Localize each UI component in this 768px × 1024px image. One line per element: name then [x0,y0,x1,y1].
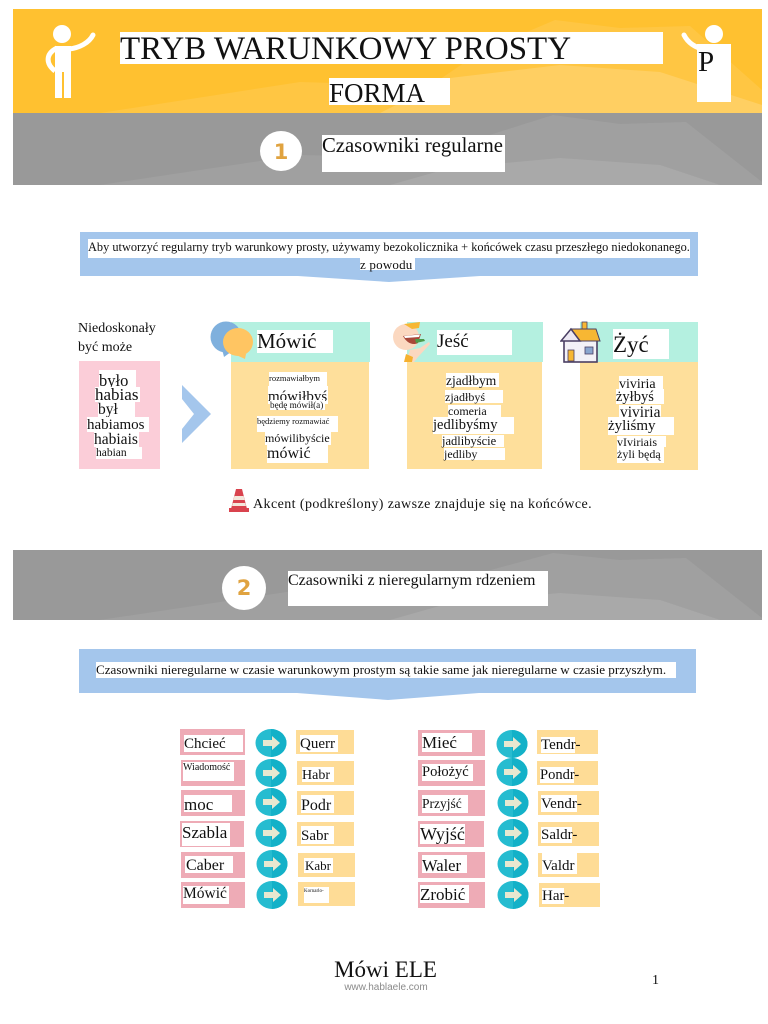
verb heading: Mówić [257,329,316,353]
conjugated form: rozmawiałbym [269,373,320,383]
verb row: Chcieć [180,729,245,755]
callout text line 2: z powodu [360,257,413,272]
stem: Pondr- [537,761,598,785]
conjugated form: będę mówił(a) [270,400,323,410]
icon: speech bubbles [210,322,253,359]
list: irregular stems left column [180,729,355,909]
stem: Kornarlo [298,882,355,906]
verb row: Wiadomość [181,760,245,786]
number badge 1 [260,131,302,171]
arrow 3 [256,788,286,816]
icon: house [560,322,601,363]
arrow 1 [256,729,286,757]
conjugated form: będziemy rozmawiać [257,416,329,426]
verb row: Wyjść [418,821,484,847]
verb header background [580,322,698,362]
conjugated form [448,405,501,417]
callout: regular conditional rule [80,232,698,282]
band background: yellow and gray mountains [13,9,762,185]
section heading 1: Czasowniki regularne [322,135,503,157]
stem: Har- [539,883,600,907]
stem: Sabr [297,822,354,846]
stem: Kornarlo: Kornarlo- [304,889,324,894]
number badge 1: 1 [274,140,288,164]
title fragment box: P [698,46,714,78]
verb row: Caber [181,852,245,878]
verb row: Mówić: Mówić [183,885,227,902]
conjugation background [231,362,369,469]
conjugated form: comeria [448,404,487,418]
arrow: chevron [182,385,211,443]
stem: Valdr: Valdr [542,858,574,874]
conjugated form [619,376,663,390]
ending [96,447,142,459]
conjugated form: żyłbyś [616,389,654,405]
icon: person eating [393,322,430,362]
verb row: Mówić [181,882,245,908]
band background: gray mountains [13,550,762,620]
ending [99,370,136,387]
verb row: Przyjść: Przyjść [422,796,462,811]
ending: habiais [94,431,138,448]
arrow 2 [496,758,528,786]
stem: Tendr-: Tendr- [541,737,580,753]
icon: person right [682,25,723,50]
arrow 5 [256,850,288,878]
conjugated form: mówiłbyś [268,389,327,405]
conjugated form [267,445,328,463]
verb row: Mieć: Mieć [422,733,457,752]
stem: Vendr-: Vendr [541,796,577,812]
page number: 1 [652,973,659,988]
arrow 4 [256,819,286,847]
arrow 1 [496,730,528,758]
conjugated form: viviria [620,404,660,421]
stem: Querr [296,730,354,754]
verb row: Zrobić [418,882,485,908]
conjugated form: jedlibyśmy [433,417,497,433]
verb row: moc [181,790,245,816]
verb row: Wiadomość: Wiadomość [183,762,230,773]
conjugated form: jedliby [444,447,477,461]
stem: Pondr-: Pondr- [540,767,579,783]
callout background [79,649,696,700]
verb row: Chcieć: Chcieć [184,736,226,752]
ending: było [99,371,128,390]
conjugated form: mówić [267,445,311,462]
arrow 6 [256,881,288,909]
panel: Żyć [560,322,698,470]
stem: Saldr-: Saldr- [541,827,577,843]
conjugation background [580,362,698,470]
verb row: Waler: Waler [422,856,461,875]
section band 2 [13,550,762,620]
conjugated form [608,417,674,435]
verb row: Szabla: Szabla [182,823,227,842]
verb heading [437,330,512,355]
imperfect label: Niedoskonały [78,321,156,336]
ending: habian [96,447,127,459]
title: TRYB WARUNKOWY PROSTY [120,31,571,67]
verb row: Mieć [418,730,485,756]
callout text line 1: Aby utworzyć regularny tryb warunkowy prosty, używamy bezokolicznika + końcówek czasu przeszłego niedokonanego. [88,240,690,254]
verb row: Caber: Caber [186,857,224,874]
verb header background [231,322,370,362]
stem: Vendr- [538,791,599,815]
stem: Har-: Har- [542,888,569,904]
stem: Habr: Habr [302,768,330,783]
verb row: Wyjść: Wyjść [420,824,465,844]
subtitle: FORMA [329,78,425,108]
stem: Tendr- [537,730,598,754]
verb header background [407,322,543,362]
icon: person left [46,25,96,98]
stem: Sabr: Sabr [301,828,328,844]
conjugated form [269,372,327,386]
conjugated form: zjadłbyś [445,390,485,404]
stem: Podr [297,791,354,815]
arrow 4 [498,819,528,847]
conjugated form: zjadłbym [446,373,496,388]
arrow 6 [498,881,528,909]
stem: Saldr- [538,822,599,846]
stem: Kabr: Kabr [305,858,331,873]
conjugated form: jadlibyście [442,434,496,448]
accent text: Akcent (podkreślony) zawsze znajduje się na końcówce. [253,497,592,512]
verb row: Położyć [418,760,485,786]
ending [98,402,135,417]
panel: Jeść [393,322,543,469]
stem: Vendr-: - [577,796,582,812]
title fragment box [697,44,731,102]
conjugated form [445,390,503,403]
number badge 2: 2 [237,576,251,600]
verb row: Szabla [180,821,244,847]
verb heading: Żyć [613,332,649,357]
footer brand [334,957,437,993]
list: irregular stems right column [418,730,600,909]
stem: Kabr [298,853,355,877]
section heading 1 [322,135,505,172]
arrow 3 [498,789,528,817]
conjugated form: żyliśmy [608,418,656,434]
imperfect label [78,321,156,355]
brand name: Mówi ELE [334,957,437,982]
section heading 2 [288,571,548,606]
header band with title [13,9,762,185]
panel: imperfect endings [79,361,160,469]
verb row: Waler [418,852,485,878]
arrow 5 [498,850,528,878]
icon: traffic cone [229,489,249,512]
callout background [80,232,698,282]
verb row: Położyć: Położyć [422,764,469,780]
section heading 2: Czasowniki z nieregularnym rdzeniem [288,572,535,589]
conjugated form: żyli będą [617,447,661,461]
conjugated form [444,448,505,460]
conjugated form: vIviriais [617,435,657,449]
imperfect label: być może [78,340,132,355]
conjugated form: mówilibyście [265,431,330,445]
arrow 2 [256,759,286,787]
number badge 2 [222,566,266,610]
ending: był [98,401,118,418]
callout text: Czasowniki nieregularne w czasie warunkowym prostym są takie same jak nieregularne w czasie przyszłym. [96,662,666,677]
verb heading [613,329,669,359]
callout: irregular conditional rule [79,649,696,700]
stem: Podr: Podr [301,797,331,814]
verb row: Przyjść [418,790,485,816]
conjugated form [257,416,338,432]
conjugation background [407,362,542,469]
panel: Mówić [210,322,370,469]
stem: Querr: Querr [300,736,335,752]
ending: habiamos [87,417,144,433]
stem: Habr [297,761,354,785]
verb row: moc: moc [184,795,213,814]
stem: Valdr [538,853,599,877]
verb heading: Jeść [437,331,469,352]
verb row: Zrobić: Zrobić [420,885,465,904]
conjugated form: viviria [619,377,656,392]
website: www.hablaele.com [344,982,428,993]
ending: habias [95,385,138,404]
conjugated form [617,436,666,447]
accent note [229,489,592,512]
